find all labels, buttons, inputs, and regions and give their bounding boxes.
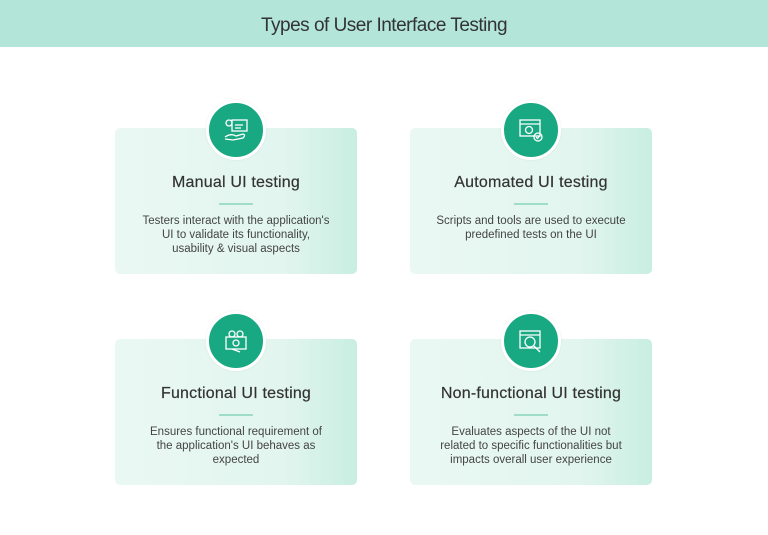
- icon: automated: [501, 100, 561, 160]
- text: manual: [142, 215, 330, 255]
- text: nonfunctional: related to specific functionalities but: [440, 440, 622, 452]
- text: functional: [150, 426, 322, 466]
- heading: automated: Automated UI testing: [454, 174, 608, 191]
- panel: nonfunctional: [410, 339, 652, 485]
- text: functional: expected: [213, 454, 259, 466]
- text: manual: Testers interact with the application's: [143, 215, 329, 227]
- icon: manual: [206, 100, 266, 160]
- icon: nonfunctional: [501, 311, 561, 371]
- text: manual: UI to validate its functionality,: [162, 229, 310, 241]
- text: nonfunctional: impacts overall user experience: [450, 454, 612, 466]
- panel: automated: [410, 128, 652, 274]
- text: nonfunctional: [440, 426, 622, 466]
- panel: manual: [115, 128, 357, 274]
- text: automated: [436, 215, 626, 241]
- heading: nonfunctional: Non-functional UI testing: [441, 385, 621, 402]
- text: nonfunctional: Evaluates aspects of the UI not: [451, 426, 611, 438]
- text: automated: Scripts and tools are used to execute: [436, 215, 626, 227]
- heading: manual: Manual UI testing: [172, 174, 300, 191]
- panel: functional: [115, 339, 357, 485]
- icon: functional: [206, 311, 266, 371]
- title: [0, 0, 768, 47]
- text: manual: usability & visual aspects: [172, 243, 300, 255]
- text: automated: predefined tests on the UI: [465, 229, 597, 241]
- heading: functional: Functional UI testing: [161, 385, 311, 402]
- text: functional: the application's UI behaves as: [157, 440, 315, 452]
- text: functional: Ensures functional requirement of: [150, 426, 322, 438]
- title: Types of User Interface Testing: [261, 15, 507, 36]
